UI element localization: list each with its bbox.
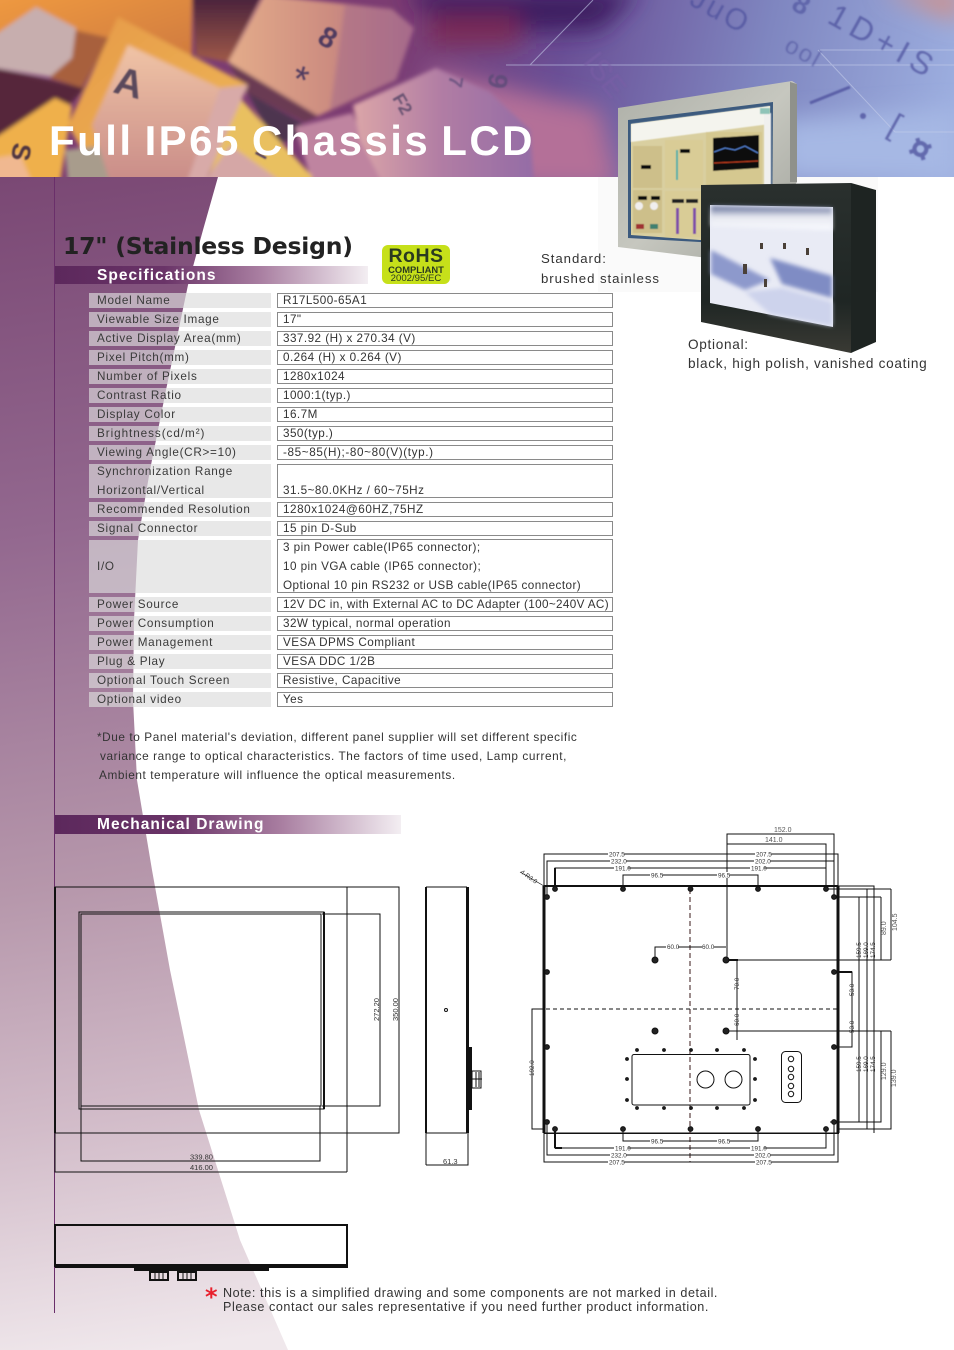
dimension labels: 232.0 xyxy=(611,1152,627,1160)
background rule lines xyxy=(506,0,954,132)
top dimension lines xyxy=(544,854,838,897)
rear view dimension drawing xyxy=(519,827,899,1166)
side view drawing: 61.3 xyxy=(443,1157,458,1166)
row: power management xyxy=(89,635,613,650)
dimension labels: 174.5 xyxy=(870,1056,877,1072)
row: viewable size: Viewable Size Image xyxy=(97,313,220,326)
row: power consumption: Power Consumption xyxy=(97,617,214,630)
dimension labels: 202.0 xyxy=(755,1152,771,1160)
mounting holes xyxy=(545,887,836,1131)
dimension labels: 191.0 xyxy=(751,866,767,872)
dimension labels: 60.0 xyxy=(702,944,715,951)
dimension labels: 191.0 xyxy=(751,1146,767,1152)
key 8 xyxy=(228,0,414,116)
indicator strip xyxy=(782,1052,802,1102)
row: input output: 10 pin VGA cable (IP65 connector); xyxy=(283,560,481,573)
caption: standard finish: Standard: xyxy=(541,251,607,266)
caption: standard finish: brushed stainless xyxy=(541,270,660,286)
badge: RoHS compliant: RoHS xyxy=(388,245,444,267)
row: power source: 12V DC in, with External AC to DC Adapter (100~240V AC) xyxy=(283,598,609,611)
product heading: 17" (Stainless Design) xyxy=(63,232,353,260)
section heading: specifications xyxy=(55,266,368,284)
row: pixel pitch: Pixel Pitch(mm) xyxy=(97,351,190,364)
bottom view drawing xyxy=(55,1225,348,1280)
row: plug and play: Plug & Play xyxy=(97,655,165,668)
keyboard keys xyxy=(0,0,192,60)
specification table xyxy=(89,293,824,1084)
row: signal connector xyxy=(89,521,613,536)
dimension labels: 191.0 xyxy=(615,1146,631,1152)
row: viewing angle xyxy=(89,445,613,460)
closing note: Note: this is a simplified drawing and some components are not marked in detail. xyxy=(223,1286,718,1300)
row: optional touch screen: Optional Touch Screen xyxy=(97,674,230,687)
row: synchronization range: 31.5~80.0KHz / 60~75Hz xyxy=(283,484,424,497)
dimension labels: 53.0 xyxy=(849,983,856,996)
row: active display area: 337.92 (H) x 270.34 (V) xyxy=(283,332,416,345)
badge: RoHS compliant xyxy=(382,245,450,284)
row: power management: Power Management xyxy=(97,636,213,649)
row: power consumption xyxy=(89,616,613,631)
dimension labels: 207.5 xyxy=(609,1160,625,1166)
row: pixel pitch: 0.264 (H) x 0.264 (V) xyxy=(283,351,402,364)
section heading: specifications: Specifications xyxy=(97,267,217,284)
front view drawing: 272.20 xyxy=(372,998,381,1021)
row: model name: R17L500-65A1 xyxy=(283,294,367,307)
front view drawing xyxy=(55,887,400,1172)
dimension labels: 96.5 xyxy=(651,872,664,880)
row: number of pixels: 1280x1024 xyxy=(283,370,345,383)
row: optional touch screen xyxy=(89,673,613,688)
dimension labels: 174.5 xyxy=(870,942,877,958)
key legends: F2 xyxy=(389,90,416,118)
key legends xyxy=(5,0,945,173)
key A xyxy=(68,17,248,182)
row: recommended resolution: 1280x1024@60HZ,75HZ xyxy=(283,503,424,516)
key legends: 9 xyxy=(481,71,514,91)
row: signal connector: 15 pin D-Sub xyxy=(283,522,357,535)
badge: RoHS compliant: COMPLIANT xyxy=(388,264,444,275)
dimension labels: 96.5 xyxy=(718,1138,731,1146)
caption: optional finish: black, high polish, vanished coating xyxy=(688,356,927,371)
row: recommended resolution: Recommended Resolution xyxy=(97,503,251,516)
row: display color: Display Color xyxy=(97,408,176,421)
closing note xyxy=(223,1286,718,1314)
dimension labels: 96.5 xyxy=(651,1138,664,1146)
footnote on optical characteristics: variance range to optical characteristics. The factors of time used, Lamp current, xyxy=(100,749,567,763)
row: input output: Optional 10 pin RS232 or USB cable(IP65 connector) xyxy=(283,579,581,592)
row: power management: VESA DPMS Compliant xyxy=(283,636,415,649)
row: brightness: 350(typ.) xyxy=(283,427,333,440)
front view drawing: 350.00 xyxy=(391,998,400,1021)
row: brightness xyxy=(89,426,613,441)
row: synchronization range: Horizontal/Vertical xyxy=(97,484,205,497)
dimension labels: 60.0 xyxy=(667,944,680,951)
row: model name: Model Name xyxy=(97,294,170,307)
icon: red asterisk: * xyxy=(205,1283,218,1311)
row: power source: Power Source xyxy=(97,598,179,611)
row: synchronization range: Synchronization Range xyxy=(97,465,233,478)
row: input output xyxy=(89,539,613,593)
key legends: ¤ xyxy=(901,126,939,173)
row: optional video xyxy=(89,692,824,1084)
dimension labels: 169.0 xyxy=(863,1056,870,1072)
row: active display area xyxy=(89,331,613,346)
row: signal connector: Signal Connector xyxy=(97,522,198,535)
row: optional video: Optional video xyxy=(97,693,182,706)
rear view dimension drawing: 152.0 xyxy=(774,827,792,834)
row: contrast ratio: Contrast Ratio xyxy=(97,389,182,402)
row: viewing angle: -85~85(H);-80~80(V)(typ.) xyxy=(283,446,434,459)
row: synchronization range xyxy=(89,464,613,498)
dimension labels: 70.0 xyxy=(734,977,741,990)
footnote on optical characteristics: *Due to Panel material's deviation, different panel supplier will set different specific xyxy=(97,730,577,744)
icon: black polished monitor xyxy=(701,183,876,353)
row: plug and play xyxy=(89,654,613,669)
key legends: S xyxy=(5,141,38,163)
mechanical drawings xyxy=(54,827,899,1281)
rear view dimension drawing: 89.0 xyxy=(881,921,888,935)
key under F2 xyxy=(295,113,385,182)
yellow strip key xyxy=(206,98,312,182)
rear view dimension drawing: 129.0 xyxy=(881,1062,888,1080)
row: recommended resolution xyxy=(89,502,613,517)
caption: standard finish xyxy=(541,251,660,286)
dimension labels: 159.5 xyxy=(856,1056,863,1072)
dimension labels: 207.5 xyxy=(756,852,772,858)
closing note: Please contact our sales representative if you need further product information. xyxy=(223,1300,709,1314)
row: power source xyxy=(89,597,613,612)
header banner with keyboard photo xyxy=(0,0,954,177)
dimension labels: 192.0 xyxy=(529,1060,536,1076)
key F2 xyxy=(353,68,534,182)
key legends: – xyxy=(249,139,274,170)
dimension labels: 53.0 xyxy=(849,1020,856,1033)
key legends: 7 xyxy=(443,74,467,89)
key legends: ool xyxy=(780,32,826,74)
dimension labels: 207.5 xyxy=(609,852,625,858)
row: number of pixels xyxy=(89,369,613,384)
rear view dimension drawing: 139.0 xyxy=(891,1069,898,1087)
front view drawing: 416.00 xyxy=(190,1163,213,1172)
key legends: ISE xyxy=(576,46,632,104)
icon: silver stainless monitor xyxy=(618,81,797,262)
dimension labels: 4-R3.0 xyxy=(519,869,539,886)
dimension labels: 60.0 xyxy=(734,1013,741,1026)
code glyph marks xyxy=(810,87,866,119)
rear view dimension drawing: 104.5 xyxy=(892,913,899,931)
row: plug and play: VESA DDC 1/2B xyxy=(283,655,375,668)
bottom dimension lines xyxy=(544,1122,838,1162)
front view drawing: 339.80 xyxy=(190,1152,213,1162)
footnote on optical characteristics xyxy=(97,730,824,1084)
dimension labels: 169.0 xyxy=(863,942,870,958)
row: display color: 16.7M xyxy=(283,408,318,421)
row: viewable size: 17" xyxy=(283,313,302,326)
row: power consumption: 32W typical, normal operation xyxy=(283,617,451,630)
caption: optional finish xyxy=(688,337,927,371)
side view drawing xyxy=(426,887,482,1166)
badge: RoHS compliant: 2002/95/EC xyxy=(391,273,441,284)
dimension labels xyxy=(519,851,877,1166)
row: optional video: Yes xyxy=(283,693,303,706)
caption: optional finish: Optional: xyxy=(688,337,749,352)
soft background tones xyxy=(405,0,954,190)
title: Full IP65 Chassis LCD xyxy=(49,117,535,164)
dimension labels: 191.0 xyxy=(615,866,631,872)
dimension labels: 232.0 xyxy=(611,858,627,866)
dimension labels: 159.5 xyxy=(856,942,863,958)
key legends: A xyxy=(110,59,148,108)
key legends: 8 xyxy=(312,20,342,56)
key legends: * xyxy=(288,58,313,103)
dimension labels: 207.5 xyxy=(756,1160,772,1166)
key legends: [ xyxy=(883,107,908,142)
dimension labels: 96.5 xyxy=(718,872,731,880)
row: viewable size xyxy=(89,312,613,327)
row: display color xyxy=(89,407,613,422)
row: model name xyxy=(89,293,613,308)
row: active display area: Active Display Area(mm) xyxy=(97,332,242,345)
left accent line xyxy=(54,177,55,1313)
row: contrast ratio: 1000:1(typ.) xyxy=(283,389,351,402)
row: input output: 3 pin Power cable(IP65 connector); xyxy=(283,541,481,554)
rear view dimension drawing: 141.0 xyxy=(765,837,783,844)
row: viewing angle: Viewing Angle(CR>=10) xyxy=(97,446,237,459)
row: pixel pitch xyxy=(89,350,613,365)
row: brightness: Brightness(cd/m²) xyxy=(97,427,205,440)
row: contrast ratio xyxy=(89,388,613,403)
footnote on optical characteristics: Ambient temperature will influence the optical measurements. xyxy=(99,768,456,782)
row: optional touch screen: Resistive, Capacitive xyxy=(283,674,401,687)
row: input output: I/O xyxy=(97,560,115,573)
row: number of pixels: Number of Pixels xyxy=(97,370,198,383)
connector cut-out xyxy=(632,1054,750,1105)
section heading: mechanical drawing xyxy=(55,815,401,834)
product photos: standard and optional panels xyxy=(618,81,876,353)
section heading: mechanical drawing: Mechanical Drawing xyxy=(97,816,265,833)
dimension labels: 202.0 xyxy=(755,858,771,866)
